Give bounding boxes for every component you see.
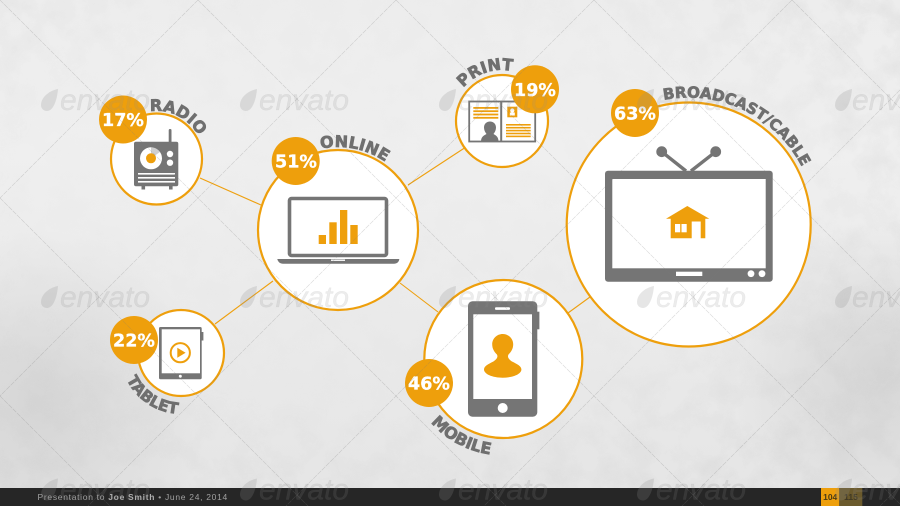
label: online: ONLINE	[320, 134, 391, 162]
label: mobile: MOBILE	[431, 414, 492, 455]
label: broadcast/cable: BROADCAST/CABLE	[663, 86, 812, 166]
badge: 46%	[405, 359, 453, 407]
icon: laptop with bar chart	[277, 198, 399, 264]
icon: open magazine	[469, 101, 535, 142]
badge: 46%: 46%	[408, 374, 450, 394]
page number: current	[821, 488, 839, 506]
circle: online	[256, 134, 420, 312]
circle: radio	[99, 96, 206, 206]
badge: 51%	[272, 137, 320, 185]
circle: print	[454, 58, 559, 168]
icon: person	[484, 334, 521, 378]
circle: mobile	[405, 278, 584, 455]
label: radio: RADIO	[150, 98, 206, 134]
icon: house	[666, 206, 709, 238]
bar chart	[319, 210, 358, 244]
badge: 22%: 22%	[113, 332, 155, 352]
connector lines between circles	[200, 147, 590, 324]
footer text: Presentation to Joe Smith • June 24, 2014	[38, 492, 228, 502]
page number: total	[839, 488, 862, 506]
icon: television	[605, 146, 773, 282]
badge: 63%	[611, 89, 659, 137]
icon: radio	[134, 129, 178, 190]
label: tablet: TABLET	[128, 374, 180, 414]
footer bar	[0, 488, 900, 506]
label: print: PRINT	[456, 58, 514, 87]
icon: tablet	[159, 327, 203, 379]
page number: current: 104	[823, 492, 838, 502]
icon: smartphone	[468, 301, 539, 417]
badge: 51%: 51%	[275, 152, 317, 172]
badge: 63%: 63%	[614, 104, 656, 124]
circle: broadcast/cable	[566, 86, 812, 348]
page number: total: 115	[844, 492, 858, 502]
badge: 17%: 17%	[102, 111, 144, 131]
circle: tablet	[110, 308, 226, 414]
badge: 19%: 19%	[514, 81, 556, 101]
envato watermarks	[41, 84, 900, 506]
